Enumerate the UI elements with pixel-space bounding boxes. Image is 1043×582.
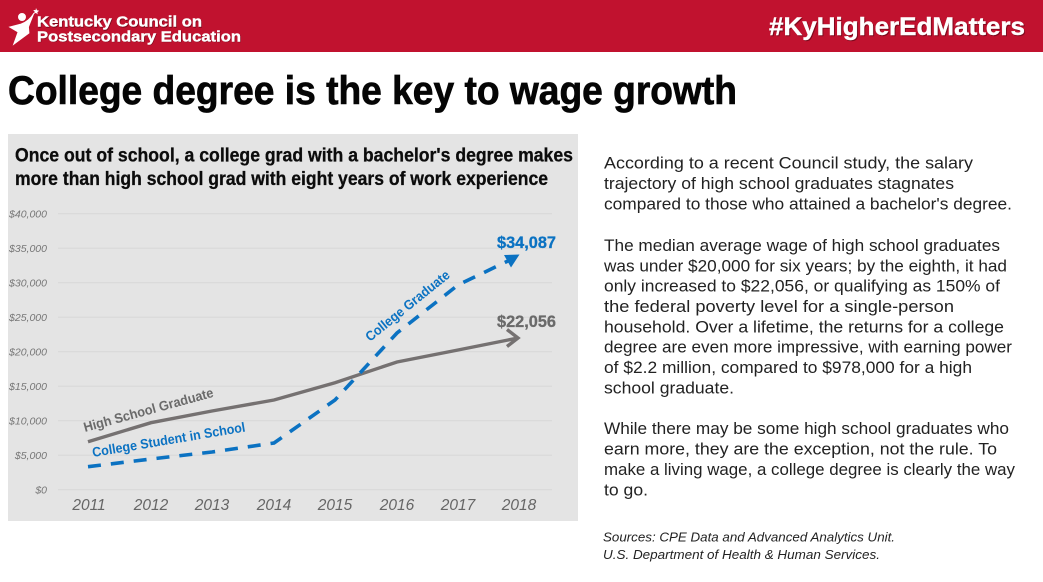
hashtag: #KyHigherEdMatters [770,14,1026,42]
logo wordmark: Postsecondary Education [38,30,242,46]
text block: median wage: only increased to $22,056, or qualifying as 150% of [604,278,1000,296]
x axis labels: 2013 [194,497,230,514]
y axis labels: $5,000 [14,450,47,462]
x axis labels: 2018 [501,497,537,514]
y axis labels: $35,000 [8,243,47,255]
text block: median wage: was under $20,000 for six years; by the eighth, it had [603,257,1007,275]
y axis labels: $25,000 [8,312,47,324]
text block: median wage [603,237,1013,397]
label: College Graduate: College Graduate [362,267,453,344]
text block: conclusion [604,420,1016,500]
text block: median wage: the federal poverty level for a single-person [604,298,954,316]
line: high school graduate [88,330,518,442]
x axis labels: 2017 [440,497,477,514]
sources: U.S. Department of Health & Human Services. [603,547,880,562]
y axis labels: $40,000 [8,208,47,220]
x axis labels: 2014 [256,497,292,514]
logo wordmark: Kentucky Council on [38,15,203,31]
x axis labels: 2016 [379,497,415,514]
y axis labels: $20,000 [8,346,47,358]
logo wordmark: Postsecondary Education [37,30,241,46]
text block: study summary: compared to those who attained a bachelor's degree. [604,196,1012,214]
text block: median wage: household. Over a lifetime, the returns for a college [604,318,1004,336]
text block: median wage: degree are even more impressive, with earning power [604,339,1013,357]
x axis labels: 2012 [133,497,169,514]
text block: conclusion: to go. [604,482,648,500]
panel: chart [8,134,578,521]
value: high school graduate: $22,056 [497,313,556,331]
header banner [0,0,1043,52]
text block: median wage: The median average wage of high school graduates [604,237,1000,255]
logo wordmark [37,15,242,46]
text block: study summary: According to a recent Council study, the salary [604,154,974,172]
text block: conclusion: While there may be some high school graduates who [604,420,1009,438]
sources: Sources: CPE Data and Advanced Analytics Unit. [603,530,895,544]
chart heading: more than high school grad with eight years of work experience [15,168,548,190]
y axis labels: $15,000 [8,381,47,393]
y axis labels [8,208,47,496]
x axis labels: 2011 [71,497,106,514]
text block: study summary [604,154,1012,214]
title: College degree is the key to wage growth [8,69,737,113]
text block: study summary: trajectory of high school graduates stagnates [604,175,954,193]
text block: median wage: school graduate. [604,379,734,397]
arrow: college graduate [504,254,520,268]
y axis labels: $10,000 [8,416,47,428]
hashtag: #KyHigherEdMatters [769,13,1025,41]
logo wordmark: Kentucky Council on [37,15,202,31]
text block: median wage: of $2.2 million, compared to $978,000 for a high [604,359,972,377]
y axis labels: $30,000 [8,278,47,290]
chart heading: Once out of school, a college grad with a bachelor's degree makes [15,144,573,166]
x axis labels [71,497,537,514]
y axis labels: $0 [34,484,47,496]
sources [603,530,895,562]
icon: star figure logo [10,8,39,44]
text block: conclusion: make a living wage, a college degree is clearly the way [604,461,1016,479]
label: High School Graduate: High School Graduate [82,385,215,435]
chart heading [15,144,573,190]
value: college graduate: $34,087 [497,234,556,252]
line: college graduate [88,254,520,467]
arrow: high school graduate [507,330,518,346]
x axis labels: 2015 [317,497,353,514]
text block: conclusion: earn more, they are the exception, not the rule. To [604,440,997,458]
gridlines [58,214,552,490]
label: College Student in School: College Student in School [91,420,246,460]
